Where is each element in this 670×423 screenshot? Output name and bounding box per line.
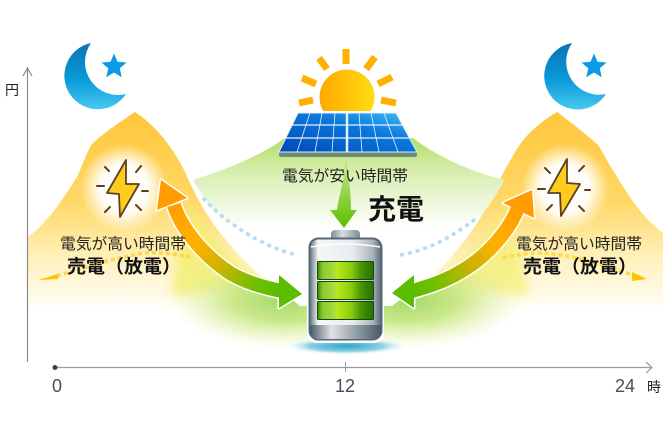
icon: left lightning <box>97 160 148 217</box>
icon: left moon and star <box>64 43 126 109</box>
panel: right evening price peak <box>400 112 663 325</box>
x axis: 0 <box>52 376 62 396</box>
arrow: left two-way <box>157 180 302 308</box>
icon: right moon and star <box>544 43 606 110</box>
dotted arrow: left yellow <box>38 253 190 280</box>
x axis <box>52 362 661 396</box>
label: left sell: 売電（放電） <box>67 256 181 277</box>
x axis: 時 <box>647 379 661 395</box>
icon: battery <box>284 230 408 355</box>
label: charge: 充電 <box>368 194 424 225</box>
icon: right lightning <box>538 159 590 216</box>
arrow: panel to battery <box>330 160 357 228</box>
x axis: 12 <box>335 376 355 396</box>
y axis <box>5 68 32 362</box>
icon: sun <box>299 49 396 111</box>
dashed line: right night power <box>400 217 478 255</box>
arrow: right two-way <box>392 190 534 308</box>
x axis: 24 <box>615 376 635 396</box>
panel: green glow under battery <box>177 272 516 346</box>
label: cheap hours: 電気が安い時間帯 <box>282 167 408 185</box>
label: left expensive hours: 電気が高い時間帯 <box>60 235 186 253</box>
dashed line: left night power <box>203 198 297 255</box>
icon: solar panel <box>279 113 417 157</box>
panel: midday green hill <box>193 138 505 230</box>
dotted arrow: right yellow <box>503 253 647 281</box>
y axis: 円 <box>5 82 19 98</box>
panel: left evening price peak <box>28 112 300 325</box>
label: right sell: 売電（放電） <box>523 256 637 277</box>
label: right expensive hours: 電気が高い時間帯 <box>516 235 642 253</box>
